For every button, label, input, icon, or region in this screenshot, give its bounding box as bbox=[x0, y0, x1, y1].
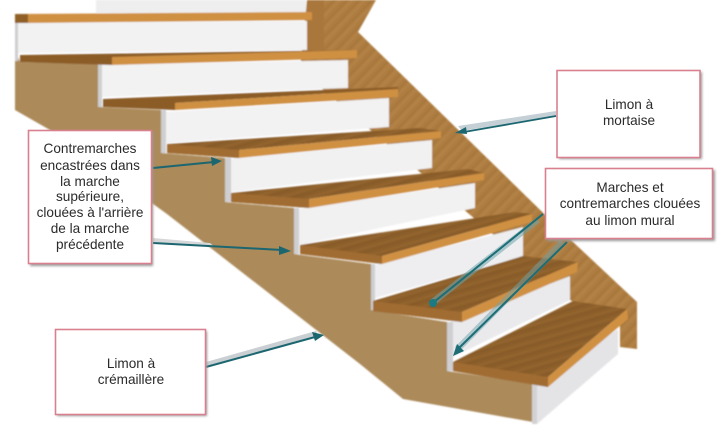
callout: contremarches: la marche bbox=[60, 174, 120, 189]
callout: limon à crémaillère: crémaillère bbox=[98, 372, 164, 387]
callout: limon à crémaillère: Limon à bbox=[107, 356, 156, 371]
arrow: limon à mortaise bbox=[455, 111, 556, 134]
callout: contremarches: clouées à l'arrière bbox=[37, 205, 143, 220]
callout: marches et contremarches: contremarches clouées bbox=[560, 196, 700, 211]
callout: contremarches: supérieure, bbox=[56, 189, 124, 204]
callout: contremarches: encastrées dans bbox=[40, 158, 140, 173]
top riser bbox=[96, 0, 306, 13]
arrows: marches et contremarches bbox=[429, 214, 567, 356]
callout: limon à crémaillère bbox=[56, 330, 207, 416]
arrow: contremarches vers marche précédente bbox=[153, 238, 291, 255]
wall stringer (limon à mortaise) bbox=[300, 0, 637, 349]
callout: limon à mortaise: mortaise bbox=[603, 113, 655, 128]
arrow: limon à crémaillère bbox=[206, 331, 324, 367]
arrow: contremarches vers marche supérieure bbox=[153, 157, 222, 168]
callout: marches et contremarches: au limon mural bbox=[585, 213, 675, 228]
risers bbox=[15, 21, 618, 424]
callout: limon à mortaise bbox=[557, 70, 702, 159]
wall stringer post bbox=[307, 0, 324, 50]
sawtooth stringer (limon à crémaillère) bbox=[15, 50, 537, 422]
callout: contremarches: précédente bbox=[56, 237, 124, 252]
treads bbox=[15, 12, 628, 387]
callout: marches et contremarches bbox=[546, 168, 715, 241]
callout: marches et contremarches: Marches et bbox=[596, 180, 664, 195]
callout: contremarches: Contremarches bbox=[44, 141, 137, 156]
callout: limon à mortaise: Limon à bbox=[605, 97, 654, 112]
callout: contremarches bbox=[28, 130, 153, 266]
callout: contremarches: de la marche bbox=[51, 221, 129, 236]
